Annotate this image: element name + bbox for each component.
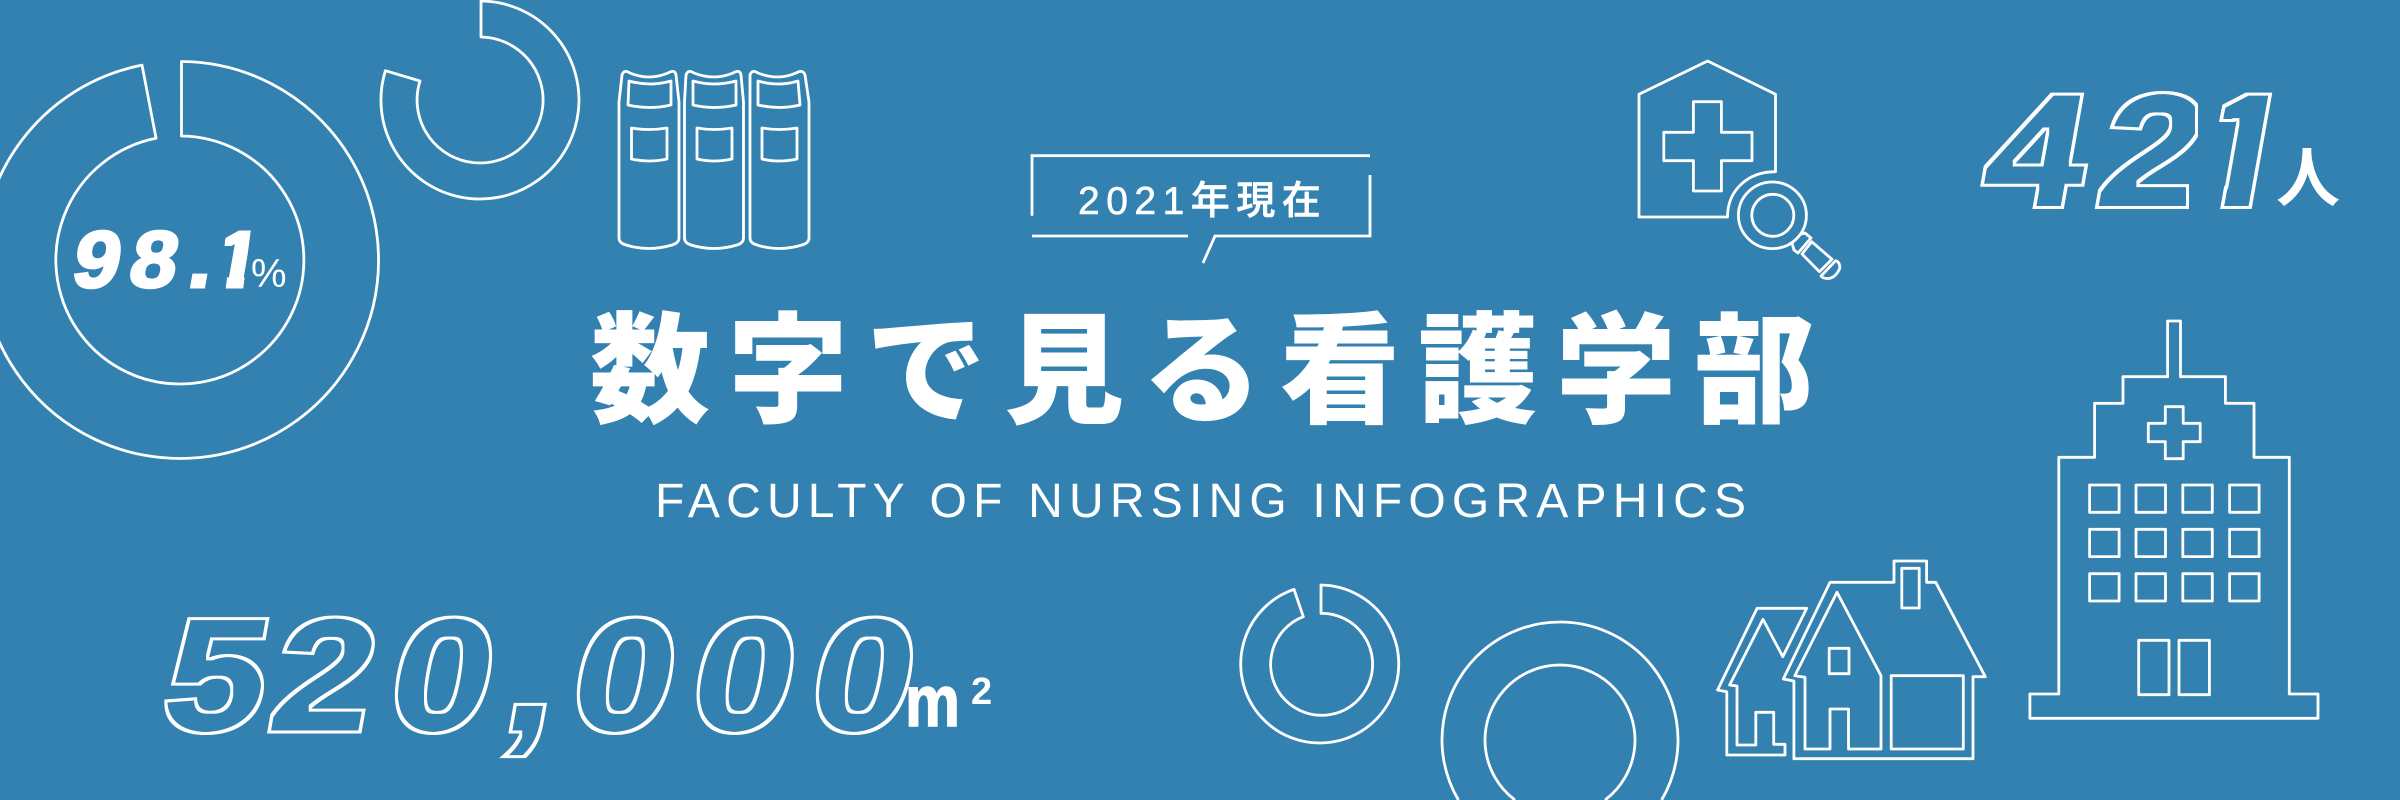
stat: 520,000 m2 — [152, 587, 992, 764]
windows — [2090, 485, 2259, 601]
donut chart: small top — [381, 1, 579, 199]
donut chart: small bottom — [1241, 585, 1399, 743]
stat: 98.1% donut — [0, 62, 379, 458]
building outline — [2030, 321, 2318, 718]
stat: 421 people — [1980, 91, 2339, 209]
icon: hospital search — [1639, 61, 1840, 278]
book 2 — [684, 71, 744, 249]
unit: 人: 人 — [2276, 143, 2340, 215]
book 1 — [619, 71, 679, 249]
icon: houses — [1718, 561, 1985, 759]
donut chart: large — [0, 62, 379, 458]
value: 520,000: 520,000 — [152, 587, 930, 764]
unit superscript: 2 — [971, 671, 992, 713]
roof cross — [2148, 407, 2200, 459]
house window — [1829, 648, 1849, 674]
value unit: percent: % — [251, 252, 287, 296]
garage — [1891, 676, 1963, 749]
title: 数字で見る看護学部 — [590, 305, 1832, 439]
subtitle: FACULTY OF NURSING INFOGRAPHICS — [655, 475, 1746, 528]
magnifying glass — [1738, 182, 1840, 278]
chimney — [1902, 568, 1919, 608]
icon: books — [619, 71, 809, 249]
medical cross — [1664, 102, 1752, 191]
year text: 2021年現在 — [1078, 180, 1327, 223]
doors — [2139, 640, 2209, 695]
unit: m2: m — [905, 662, 960, 742]
small house — [1718, 608, 1807, 755]
speech box outline — [1032, 156, 1370, 263]
value: 98.1: 98.1 — [67, 214, 269, 304]
value: 421: 421 — [1972, 62, 2309, 240]
large house inner — [1795, 592, 1881, 749]
book 3 — [750, 71, 809, 249]
large house outer — [1783, 561, 1985, 759]
label: 2021年現在 speech box — [1032, 156, 1370, 263]
icon: hospital building — [2030, 321, 2318, 718]
shield building — [1639, 61, 1776, 217]
donut ring: large bottom — [1442, 622, 1678, 800]
